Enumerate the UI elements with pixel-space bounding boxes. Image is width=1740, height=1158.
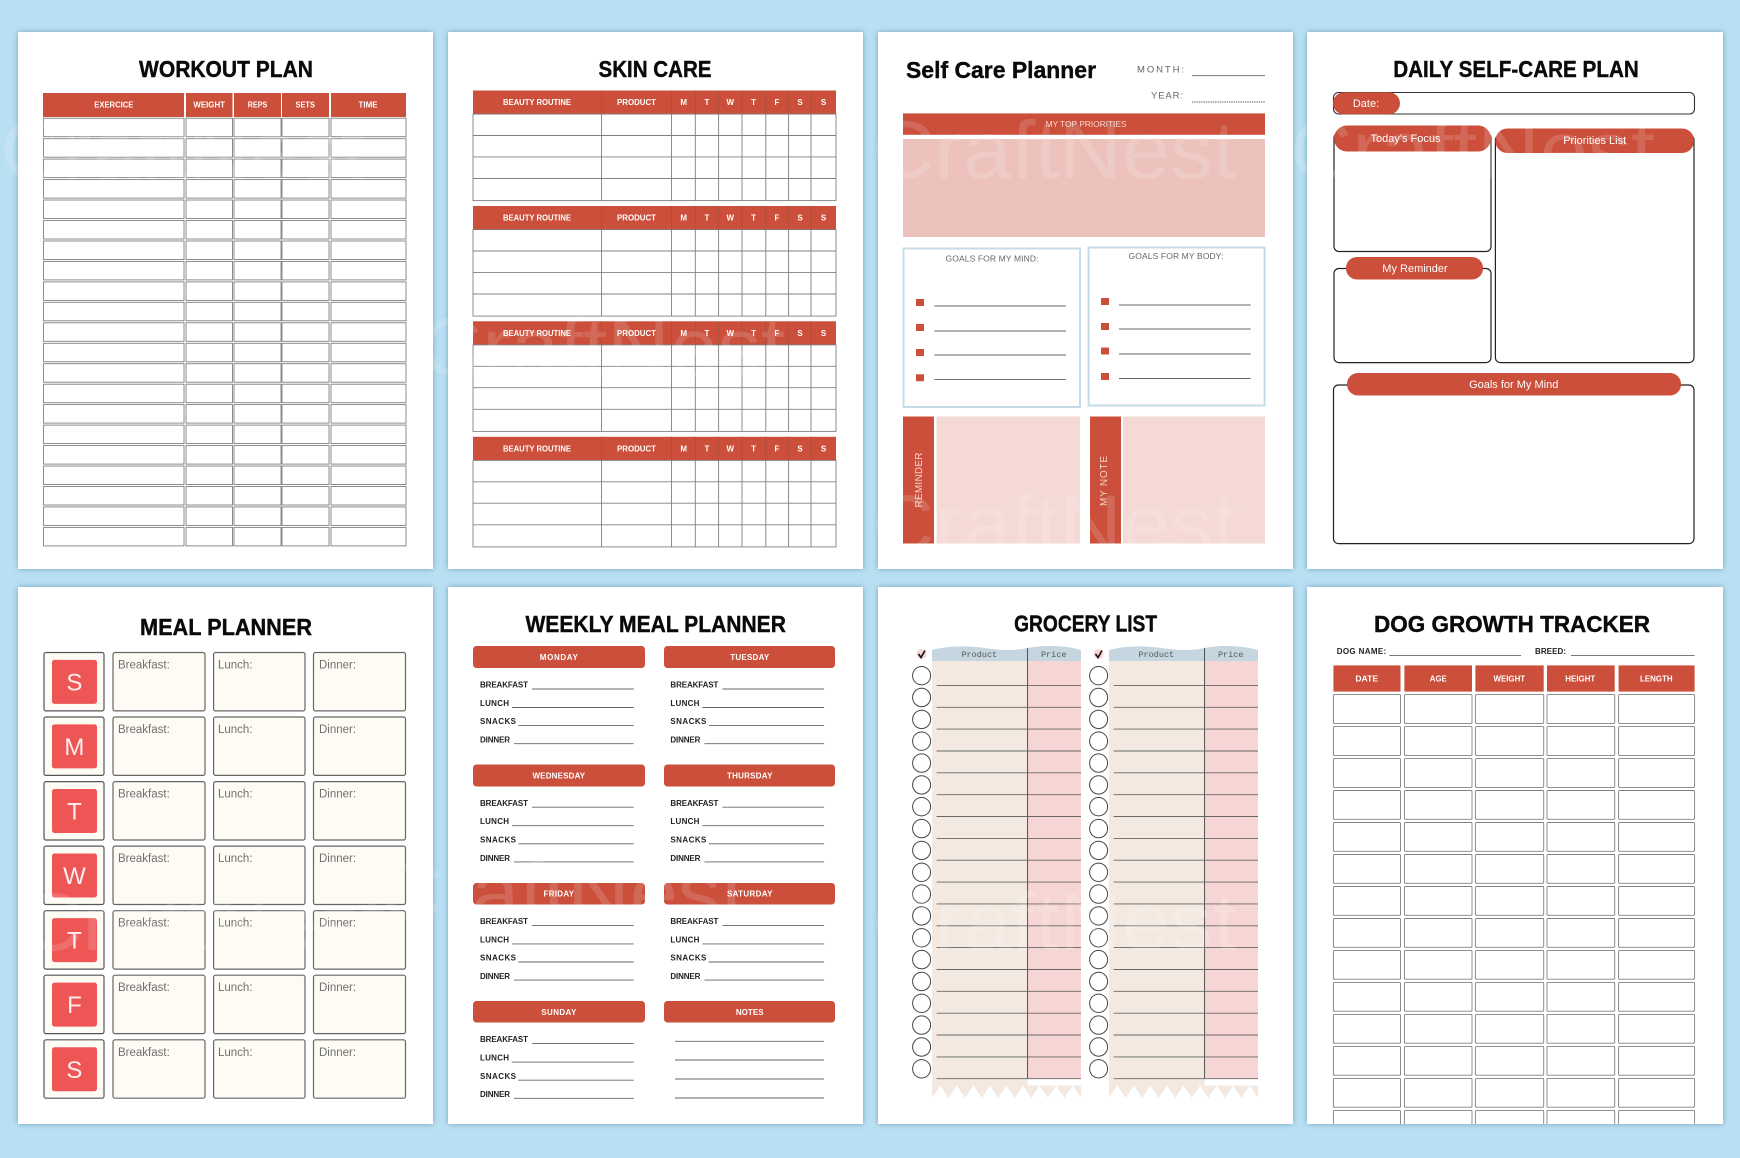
dog tracker rows <box>1333 695 1695 1139</box>
meal row: wednesday: Dinner: <box>319 853 356 865</box>
day: friday: BREAKFAST <box>480 917 528 926</box>
skin care table 4: PRODUCT <box>617 444 656 453</box>
watermarks: CraftNest <box>420 302 785 393</box>
dog name and breed fields <box>1337 647 1695 656</box>
meal row: saturday: S <box>66 1057 82 1084</box>
skin care table 1: T <box>705 98 710 107</box>
workout table header: SETS <box>296 101 316 110</box>
meal row: wednesday: Lunch: <box>218 853 253 865</box>
meal row: monday: M <box>64 734 84 761</box>
skin care table 2: T <box>751 214 756 222</box>
goals for my body <box>1089 248 1265 406</box>
workout table header <box>43 93 406 117</box>
day: tuesday: DINNER <box>670 736 701 745</box>
dog tracker header: AGE <box>1430 674 1447 684</box>
day: saturday: SATURDAY <box>727 890 773 899</box>
meal row: tuesday <box>44 782 406 840</box>
heading: skin care: SKIN CARE <box>598 56 712 82</box>
day: saturday: BREAKFAST <box>670 917 719 926</box>
watermarks: CraftNest <box>1290 105 1655 196</box>
skin care table 2: S <box>821 214 827 222</box>
skin care table 1: W <box>727 98 735 107</box>
goals for my mind: GOALS FOR MY MIND: <box>946 254 1038 264</box>
reminder block: REMINDER <box>914 452 925 508</box>
day: saturday: DINNER <box>670 972 701 981</box>
skin care table 3: S <box>821 329 827 338</box>
meal row: sunday: Breakfast: <box>118 660 170 672</box>
meal row: saturday: Dinner: <box>319 1047 356 1059</box>
date field: Date: <box>1353 98 1379 110</box>
skin care table 1: M <box>680 98 687 107</box>
skin care table 2: F <box>775 214 780 222</box>
meal row: saturday: Breakfast: <box>118 1047 170 1059</box>
day: friday: SNACKS <box>480 954 517 963</box>
skin care table 1 <box>473 90 836 201</box>
skin care table 4: T <box>751 444 756 453</box>
panel: meal planner <box>18 587 433 1124</box>
reminder block <box>903 416 1080 544</box>
day: monday: BREAKFAST <box>480 681 528 690</box>
goals for my body: GOALS FOR MY BODY: <box>1128 251 1224 261</box>
grocery column 2 <box>1090 646 1258 1098</box>
day: friday: DINNER <box>480 972 510 981</box>
dog tracker header: HEIGHT <box>1565 674 1595 684</box>
panel: skin care <box>448 32 863 569</box>
priorities list box <box>1495 128 1694 363</box>
goals for my mind <box>904 248 1080 407</box>
day: thursday: THURSDAY <box>727 772 773 780</box>
skin care table 3: T <box>705 329 710 338</box>
day: wednesday: LUNCH <box>480 817 509 826</box>
workout table header: TIME <box>358 101 378 110</box>
heading: weekly meal planner: WEEKLY MEAL PLANNER <box>525 611 786 637</box>
notes block: NOTES <box>736 1008 764 1017</box>
panel: workout plan <box>18 32 433 569</box>
meal row: tuesday: Breakfast: <box>118 789 170 801</box>
skin care table 4: BEAUTY ROUTINE <box>503 444 572 453</box>
month and year fields: YEAR: <box>1151 91 1183 102</box>
my reminder box: My Reminder <box>1382 263 1448 275</box>
day: wednesday: DINNER <box>480 854 510 863</box>
meal row: tuesday: Lunch: <box>218 789 253 801</box>
skin care table 2: M <box>680 214 687 222</box>
priorities list box: Priorities List <box>1563 135 1626 147</box>
day: wednesday: WEDNESDAY <box>532 772 586 780</box>
panel: dog growth tracker <box>1307 587 1723 1139</box>
dog tracker header: LENGTH <box>1640 674 1673 684</box>
skin care table 4: W <box>727 444 735 453</box>
today's focus box <box>1334 126 1491 252</box>
skin care table 3 <box>473 321 836 431</box>
day: thursday: LUNCH <box>670 817 700 826</box>
day: tuesday: SNACKS <box>670 717 707 726</box>
goals for my mind box: Goals for My Mind <box>1469 379 1558 391</box>
dog name and breed fields: BREED: <box>1535 647 1566 656</box>
skin care table 1: BEAUTY ROUTINE <box>503 98 572 107</box>
day: friday: FRIDAY <box>544 890 575 899</box>
day: sunday: DINNER <box>480 1090 510 1099</box>
day: monday: DINNER <box>480 736 510 745</box>
watermarks: CraftNest <box>872 877 1237 968</box>
dog tracker header: WEIGHT <box>1494 674 1525 684</box>
meal row: sunday <box>44 652 406 711</box>
grocery column 1 <box>913 646 1081 1098</box>
day: wednesday <box>473 764 645 863</box>
skin care table 1: F <box>775 98 780 107</box>
dog name and breed fields: DOG NAME: <box>1337 647 1386 656</box>
notes block <box>664 1001 835 1098</box>
day: saturday: LUNCH <box>670 935 700 944</box>
goals for my mind box <box>1334 373 1694 544</box>
panel: weekly meal planner <box>448 587 863 1124</box>
meal row: saturday <box>44 1040 406 1098</box>
meal row: wednesday: Breakfast: <box>118 853 170 865</box>
skin care table 4 <box>473 437 836 547</box>
watermarks <box>0 105 1655 968</box>
panel: self care planner <box>878 32 1293 569</box>
meal row: saturday: Lunch: <box>218 1047 253 1059</box>
meal row: thursday <box>44 911 406 969</box>
skin care table 4: M <box>680 444 687 453</box>
meal row: tuesday: Dinner: <box>319 789 356 801</box>
heading: workout plan: WORKOUT PLAN <box>139 56 313 82</box>
heading: daily self-care plan: DAILY SELF-CARE PLAN <box>1393 56 1639 82</box>
skin care table 1: PRODUCT <box>617 98 656 107</box>
skin care table 3: F <box>775 329 780 338</box>
meal row: wednesday: W <box>63 863 86 890</box>
skin care table 1: T <box>751 98 756 107</box>
heading: meal planner: MEAL PLANNER <box>140 614 312 640</box>
day: sunday: LUNCH <box>480 1054 509 1063</box>
date field <box>1333 92 1694 114</box>
my top priorities block: MY TOP PRIORITIES <box>1046 119 1127 129</box>
workout table header: REPS <box>248 101 268 110</box>
day: sunday: SNACKS <box>480 1072 517 1081</box>
panel: grocery list <box>878 587 1293 1124</box>
grocery column 2: Product <box>1138 650 1174 660</box>
day: monday: SNACKS <box>480 717 517 726</box>
skin care table 1: S <box>821 98 827 107</box>
my reminder box <box>1334 257 1491 363</box>
meal row: thursday: Dinner: <box>319 918 356 930</box>
day: tuesday: LUNCH <box>670 699 700 708</box>
day: friday: LUNCH <box>480 935 509 944</box>
workout table rows <box>44 118 406 546</box>
day: saturday <box>664 883 835 981</box>
my note block <box>1090 416 1265 544</box>
day: wednesday: BREAKFAST <box>480 799 528 808</box>
meal row: monday: Breakfast: <box>118 724 170 736</box>
day: sunday: SUNDAY <box>541 1008 577 1017</box>
watermarks: CraftNest <box>20 877 385 968</box>
day: monday <box>473 646 645 745</box>
day: thursday: BREAKFAST <box>670 799 719 808</box>
day: thursday <box>664 764 835 863</box>
meal row: sunday: S <box>66 670 82 696</box>
meal row: friday: Lunch: <box>218 982 253 994</box>
skin care table 3: M <box>680 329 687 338</box>
day: sunday: BREAKFAST <box>480 1035 528 1044</box>
watermarks: CraftNest <box>872 479 1237 570</box>
meal row: thursday: T <box>67 928 82 955</box>
skin care table 2: W <box>727 214 735 222</box>
meal row: thursday: Breakfast: <box>118 918 170 930</box>
skin care table 2: BEAUTY ROUTINE <box>503 214 572 222</box>
my note block: MY NOTE <box>1099 456 1110 506</box>
skin care table 4: T <box>705 444 710 453</box>
day: friday <box>473 883 645 981</box>
day: tuesday: BREAKFAST <box>670 681 719 690</box>
meal row: monday: Lunch: <box>218 724 253 736</box>
skin care table 3: T <box>751 329 756 338</box>
skin care table 3: BEAUTY ROUTINE <box>503 329 572 338</box>
meal row: monday <box>44 717 406 775</box>
day: sunday <box>473 1001 645 1099</box>
skin care table 2: PRODUCT <box>617 214 656 222</box>
day: saturday: SNACKS <box>670 954 707 963</box>
watermarks: CraftNest <box>380 847 745 938</box>
watermarks: CraftNest <box>872 105 1237 196</box>
meal row: friday: Dinner: <box>319 982 356 994</box>
skin care table 2 <box>473 206 836 316</box>
grocery column 1: Product <box>961 650 997 660</box>
my top priorities block <box>903 113 1265 237</box>
heading: self care planner: Self Care Planner <box>906 57 1096 83</box>
workout table header: WEIGHT <box>193 101 225 110</box>
today's focus box: Today's Focus <box>1371 133 1441 145</box>
day: tuesday <box>664 646 835 745</box>
meal row: friday: Breakfast: <box>118 982 170 994</box>
skin care table 4: S <box>797 444 803 453</box>
day: monday: MONDAY <box>540 653 578 662</box>
dog tracker header: DATE <box>1355 674 1379 684</box>
meal row: wednesday <box>44 846 406 904</box>
watermarks: CraftNest <box>0 105 365 196</box>
panel: daily self-care plan <box>1307 32 1723 569</box>
dog tracker header <box>1333 665 1695 692</box>
skin care table 3: PRODUCT <box>617 329 656 338</box>
day: tuesday: TUESDAY <box>730 653 770 662</box>
meal row: monday: Dinner: <box>319 724 356 736</box>
day: thursday: DINNER <box>670 854 701 863</box>
month and year fields <box>1137 64 1265 102</box>
month and year fields: MONTH: <box>1137 64 1184 76</box>
meal row: friday <box>44 975 406 1034</box>
skin care table 3: W <box>727 329 735 338</box>
skin care table 3: S <box>797 329 803 338</box>
skin care table 4: S <box>821 444 827 453</box>
meal row: tuesday: T <box>67 799 82 826</box>
day: thursday: SNACKS <box>670 835 707 844</box>
meal row: friday: F <box>67 992 82 1019</box>
skin care table 2: S <box>797 214 803 222</box>
meal row: sunday: Dinner: <box>319 660 356 672</box>
meal row: thursday: Lunch: <box>218 918 253 930</box>
heading: dog growth tracker: DOG GROWTH TRACKER <box>1374 611 1650 637</box>
skin care table 2: T <box>705 214 710 222</box>
grocery column 2: Price <box>1218 650 1243 660</box>
heading: grocery list: GROCERY LIST <box>1014 610 1157 636</box>
day: wednesday: SNACKS <box>480 835 517 844</box>
meal row: sunday: Lunch: <box>218 660 253 672</box>
skin care table 1: S <box>797 98 803 107</box>
workout table header: EXERCICE <box>94 101 134 110</box>
grocery column 1: Price <box>1041 650 1066 660</box>
day: monday: LUNCH <box>480 699 509 708</box>
skin care table 4: F <box>775 444 780 453</box>
